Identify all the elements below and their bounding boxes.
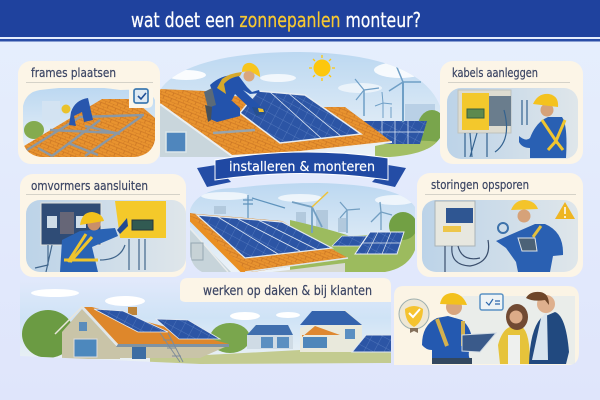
illustration: inverter connection (26, 200, 186, 272)
panel: kabels aanleggen (440, 61, 583, 164)
main scene: installing panels on a roof (160, 52, 447, 158)
icon: sun (309, 55, 335, 81)
ground panels (332, 236, 367, 246)
heading: storingen opsporen (431, 177, 529, 192)
illustration: inverter and worker (447, 88, 578, 159)
banner label: installeren & monteren (229, 159, 375, 175)
house with roof panels (62, 309, 120, 359)
title: wat doet een zonnepanlen monteur? (131, 8, 421, 32)
man client (526, 292, 569, 364)
wind turbines (292, 192, 392, 233)
heading: kabels aanleggen (452, 65, 538, 80)
roof (160, 89, 392, 156)
heading: omvormers aansluiten (31, 178, 148, 193)
panel: omvormers aansluiten (20, 174, 186, 277)
distant houses (247, 333, 293, 349)
woman client (498, 304, 530, 364)
roof solar panels (197, 215, 332, 258)
landscape with houses (20, 289, 391, 364)
worker on roof (204, 63, 265, 122)
icon: warning triangle (555, 202, 575, 219)
second scene: roof panels and landscape (190, 183, 417, 274)
icon: gear (498, 223, 508, 233)
heading: frames plaatsen (31, 65, 116, 80)
wind turbines (355, 65, 421, 122)
panel: werken op daken & bij klanten (20, 278, 403, 365)
illustration: frames on roof (23, 88, 155, 157)
label (180, 278, 391, 302)
illustration: fault finding (422, 200, 578, 272)
label: werken op daken & bij klanten (203, 284, 372, 299)
icon: checklist (129, 88, 153, 108)
solar panel (240, 91, 361, 143)
icon: checklist speech bubble (480, 294, 503, 310)
window (166, 132, 186, 152)
header band (0, 0, 600, 42)
ribbon banner: installeren & monteren (197, 152, 406, 187)
icon: approval badge (399, 299, 429, 333)
pylon (243, 195, 285, 218)
panel: storingen opsporen (417, 173, 583, 277)
technician with tablet (422, 293, 496, 364)
panel: frames plaatsen (18, 61, 160, 164)
panel: advising customers (394, 286, 579, 365)
